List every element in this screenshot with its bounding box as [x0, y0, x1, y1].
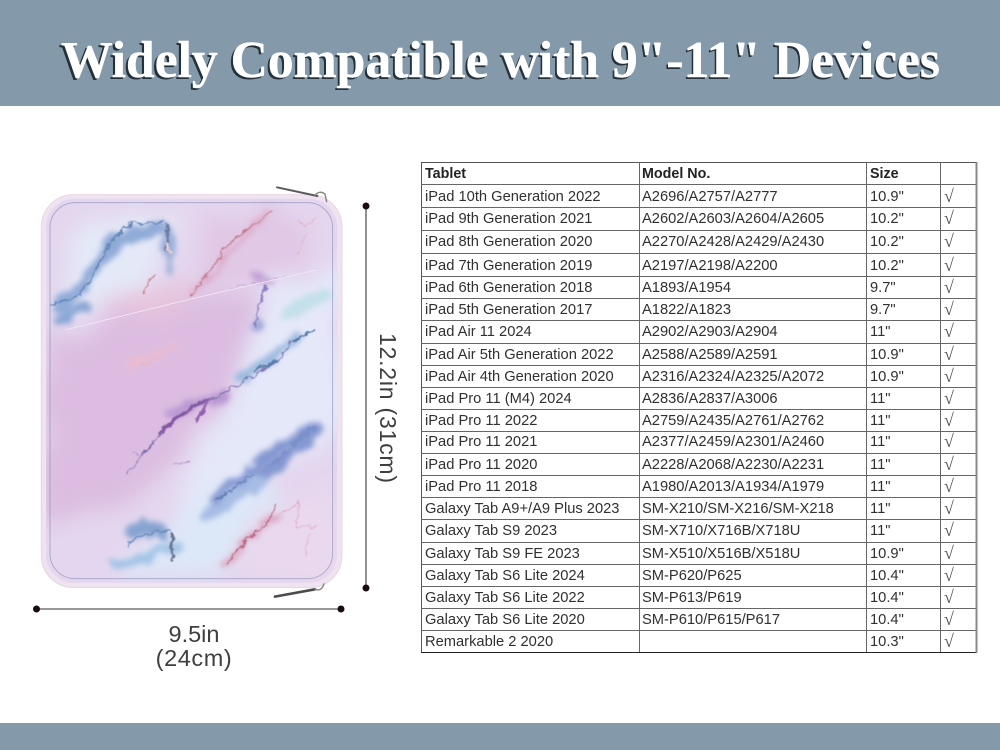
table header: Tablet	[425, 166, 466, 182]
table rows: Galaxy Tab S6 Lite 2024	[425, 568, 585, 584]
rose haze	[133, 347, 177, 363]
table rows: A2696/A2757/A2777	[642, 189, 778, 205]
table rows: 11"	[870, 391, 890, 407]
table rows: √	[944, 186, 954, 206]
width label: (24cm)	[156, 645, 232, 671]
table rows: SM-X210/SM-X216/SM-X218	[642, 501, 834, 517]
zipper edge stitch	[50, 203, 333, 579]
table rows: A2316/A2324/A2325/A2072	[642, 369, 824, 385]
table rows: iPad 10th Generation 2022	[425, 189, 601, 205]
table rows: √	[944, 299, 954, 319]
table rows: Remarkable 2 2020	[425, 634, 553, 650]
table rows: A2197/A2198/A2200	[642, 258, 778, 274]
zipper pull: top	[277, 187, 327, 202]
table rows: 11"	[870, 457, 890, 473]
table rows: A2602/A2603/A2604/A2605	[642, 211, 824, 227]
table rows: iPad Air 5th Generation 2022	[425, 347, 614, 363]
table rows: iPad 9th Generation 2021	[425, 211, 592, 227]
table rows: √	[944, 208, 954, 228]
table rows: iPad 7th Generation 2019	[425, 258, 592, 274]
table rows: 10.2"	[870, 234, 904, 250]
table rows: √	[944, 277, 954, 297]
height dimension line	[362, 202, 370, 592]
title: Widely Compatible with 9"-11" Devices	[58, 34, 938, 91]
table rows: iPad Air 11 2024	[425, 324, 532, 340]
bottom banner	[0, 723, 1000, 750]
table rows: 11"	[870, 523, 890, 539]
table rows: A1893/A1954	[642, 280, 731, 296]
table rows: 10.3"	[870, 634, 904, 650]
table rows: A2836/A2837/A3006	[642, 391, 778, 407]
table header	[425, 166, 899, 182]
table rows: SM-X710/X716B/X718U	[642, 523, 800, 539]
table rows: iPad Pro 11 (M4) 2024	[425, 391, 572, 407]
table rows: 10.4"	[870, 612, 904, 628]
table rows: 9.7"	[870, 280, 896, 296]
table rows: iPad Pro 11 2022	[425, 413, 537, 429]
table rows: √	[944, 565, 954, 585]
table rows: 10.4"	[870, 590, 904, 606]
table rows: 11"	[870, 479, 890, 495]
table rows: iPad Air 4th Generation 2020	[425, 369, 614, 385]
table rows: √	[944, 231, 954, 251]
table rows: √	[944, 587, 954, 607]
table rows: 10.2"	[870, 211, 904, 227]
table rows: Galaxy Tab S6 Lite 2020	[425, 612, 585, 628]
table rows: 11"	[870, 413, 890, 429]
case body	[42, 195, 342, 587]
table rows: 11"	[870, 324, 890, 340]
table rows: 10.9"	[870, 546, 904, 562]
table rows: √	[944, 476, 954, 496]
table rows: √	[944, 520, 954, 540]
pocket seam	[65, 270, 317, 330]
width label: 9.5in	[169, 621, 219, 647]
crisp veins	[50, 212, 317, 563]
table grid	[421, 162, 977, 653]
table rows: iPad Pro 11 2018	[425, 479, 537, 495]
table rows: √	[944, 543, 954, 563]
compatibility table	[421, 162, 977, 653]
table rows: √	[944, 321, 954, 341]
table rows: iPad Pro 11 2021	[425, 434, 537, 450]
table rows: 10.9"	[870, 369, 904, 385]
table rows: Galaxy Tab A9+/A9 Plus 2023	[425, 501, 619, 517]
zipper pull: bottom	[275, 584, 324, 597]
table rows: 11"	[870, 501, 890, 517]
table rows: √	[944, 498, 954, 518]
table rows: √	[944, 344, 954, 364]
table rows: √	[944, 631, 954, 651]
table header: Size	[870, 166, 899, 182]
table rows	[425, 186, 954, 651]
table rows: SM-X510/X516B/X518U	[642, 546, 800, 562]
table rows: 11"	[870, 434, 890, 450]
table rows: A2270/A2428/A2429/A2430	[642, 234, 824, 250]
width dimension line	[33, 606, 344, 612]
marble texture	[40, 197, 343, 585]
table rows: 10.2"	[870, 258, 904, 274]
table rows: Galaxy Tab S6 Lite 2022	[425, 590, 585, 606]
table rows: iPad 5th Generation 2017	[425, 302, 592, 318]
table rows: A2588/A2589/A2591	[642, 347, 778, 363]
top banner	[0, 0, 1000, 106]
height label: 12.2in (31cm)	[375, 333, 401, 483]
width label	[156, 621, 232, 671]
table rows: √	[944, 366, 954, 386]
table rows: A2759/A2435/A2761/A2762	[642, 413, 824, 429]
table rows: √	[944, 255, 954, 275]
table rows: √	[944, 388, 954, 408]
table rows: 10.9"	[870, 189, 904, 205]
table rows: 10.9"	[870, 347, 904, 363]
table rows: A1822/A1823	[642, 302, 731, 318]
title: Widely Compatible with 9"-11" Devices	[61, 32, 940, 89]
table header: Model No.	[642, 166, 710, 182]
table rows: √	[944, 609, 954, 629]
table rows: √	[944, 410, 954, 430]
table rows: A2377/A2459/A2301/A2460	[642, 434, 824, 450]
table rows: SM-P610/P615/P617	[642, 612, 780, 628]
table rows: iPad 8th Generation 2020	[425, 234, 592, 250]
tablet case with marble pattern	[40, 187, 343, 597]
table rows: A2902/A2903/A2904	[642, 324, 778, 340]
table rows: SM-P613/P619	[642, 590, 742, 606]
table rows: Galaxy Tab S9 2023	[425, 523, 557, 539]
table rows: 9.7"	[870, 302, 896, 318]
table rows: iPad 6th Generation 2018	[425, 280, 592, 296]
table rows: A2228/A2068/A2230/A2231	[642, 457, 824, 473]
table rows: √	[944, 431, 954, 451]
table rows: A1980/A2013/A1934/A1979	[642, 479, 824, 495]
blue haze	[57, 212, 323, 567]
table rows: SM-P620/P625	[642, 568, 742, 584]
table rows: √	[944, 454, 954, 474]
table rows: 10.4"	[870, 568, 904, 584]
table rows: iPad Pro 11 2020	[425, 457, 537, 473]
table rows: Galaxy Tab S9 FE 2023	[425, 546, 580, 562]
